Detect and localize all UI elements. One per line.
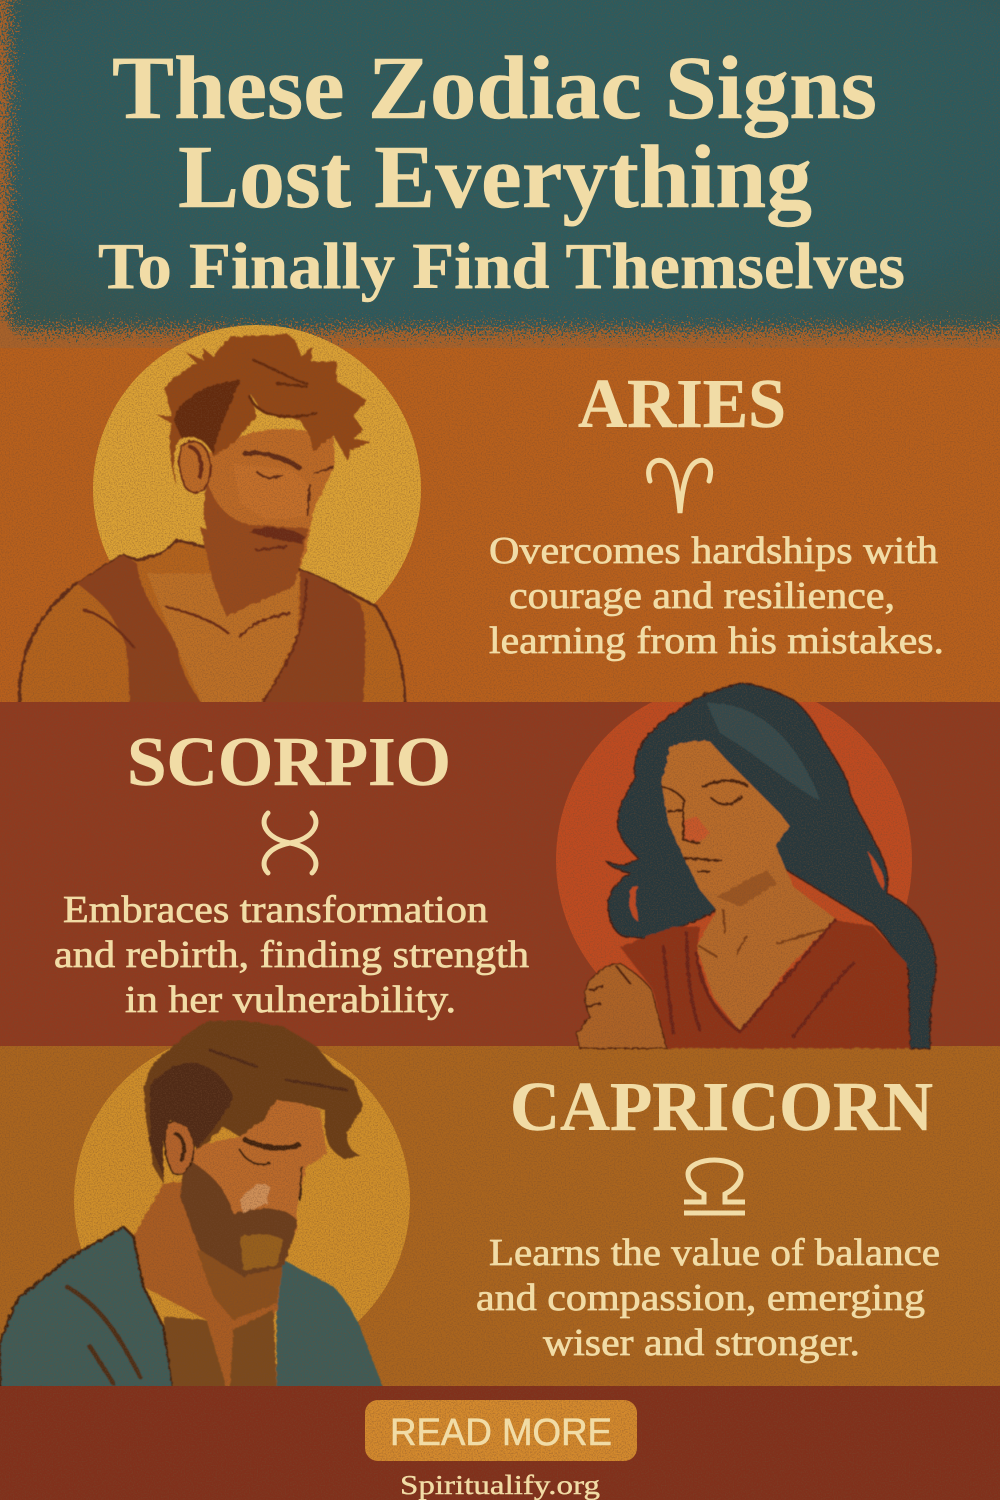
beard xyxy=(180,1157,297,1277)
heading: Capricorn: CAPRICORN xyxy=(510,1069,933,1146)
neck and chest xyxy=(697,840,835,1032)
vest right xyxy=(260,570,365,707)
text block: Capricorn description: Learns the value of balance xyxy=(489,1232,940,1274)
icon: Capricorn symbol xyxy=(684,1160,745,1213)
text block: Capricorn description: wiser and stronger. xyxy=(543,1322,860,1364)
icon: Aries symbol xyxy=(649,460,711,513)
man body xyxy=(20,540,405,707)
ear xyxy=(165,1121,194,1175)
hair xyxy=(157,333,371,487)
text block: Scorpio description: in her vulnerability. xyxy=(125,979,456,1021)
background under header xyxy=(0,0,1000,360)
heading: Aries: ARIES xyxy=(578,366,786,443)
text block: Capricorn description: and compassion, emerging xyxy=(476,1277,925,1319)
inner shirt xyxy=(163,1310,277,1388)
beard xyxy=(203,480,308,582)
button label: read more: READ MORE xyxy=(390,1412,612,1454)
text block: Capricorn description xyxy=(476,1232,940,1364)
panel: Scorpio illustration xyxy=(556,682,936,1048)
halo xyxy=(93,325,421,604)
text block: Aries description: learning from his mistakes. xyxy=(489,620,944,662)
dress xyxy=(620,920,910,1048)
panel: Aries illustration xyxy=(20,325,421,707)
halo xyxy=(556,682,912,1038)
title: Lost Everything xyxy=(178,128,812,227)
face xyxy=(180,1093,327,1270)
halo xyxy=(74,1032,410,1368)
ear xyxy=(179,441,210,493)
background bands xyxy=(0,348,1000,1500)
face xyxy=(662,741,790,893)
man neck xyxy=(133,1177,287,1388)
title: These Zodiac Signs xyxy=(112,39,877,138)
text block: Scorpio description xyxy=(54,889,529,1021)
face xyxy=(207,429,335,580)
hand xyxy=(577,963,667,1048)
text block: Aries description: courage and resilience, xyxy=(509,575,895,617)
woman hair xyxy=(607,683,936,1048)
icon: Scorpio symbol xyxy=(264,813,316,873)
title: To Finally Find Themselves xyxy=(98,230,905,303)
header panel xyxy=(8,0,1000,330)
panel: Capricorn illustration xyxy=(0,1020,410,1388)
title xyxy=(98,39,905,303)
vest left xyxy=(77,555,203,707)
hair xyxy=(143,1020,363,1183)
button shape: read more xyxy=(365,1400,637,1461)
text block: Scorpio description: and rebirth, finding strength xyxy=(54,934,529,976)
heading: Scorpio: SCORPIO xyxy=(127,724,451,801)
text block: Scorpio description: Embraces transformation xyxy=(63,889,488,931)
text block: Aries description: Overcomes hardships with xyxy=(489,530,938,572)
footer: website: Spiritualify.org xyxy=(400,1470,600,1500)
text block: Aries description xyxy=(489,530,944,662)
shirt xyxy=(0,1227,173,1388)
